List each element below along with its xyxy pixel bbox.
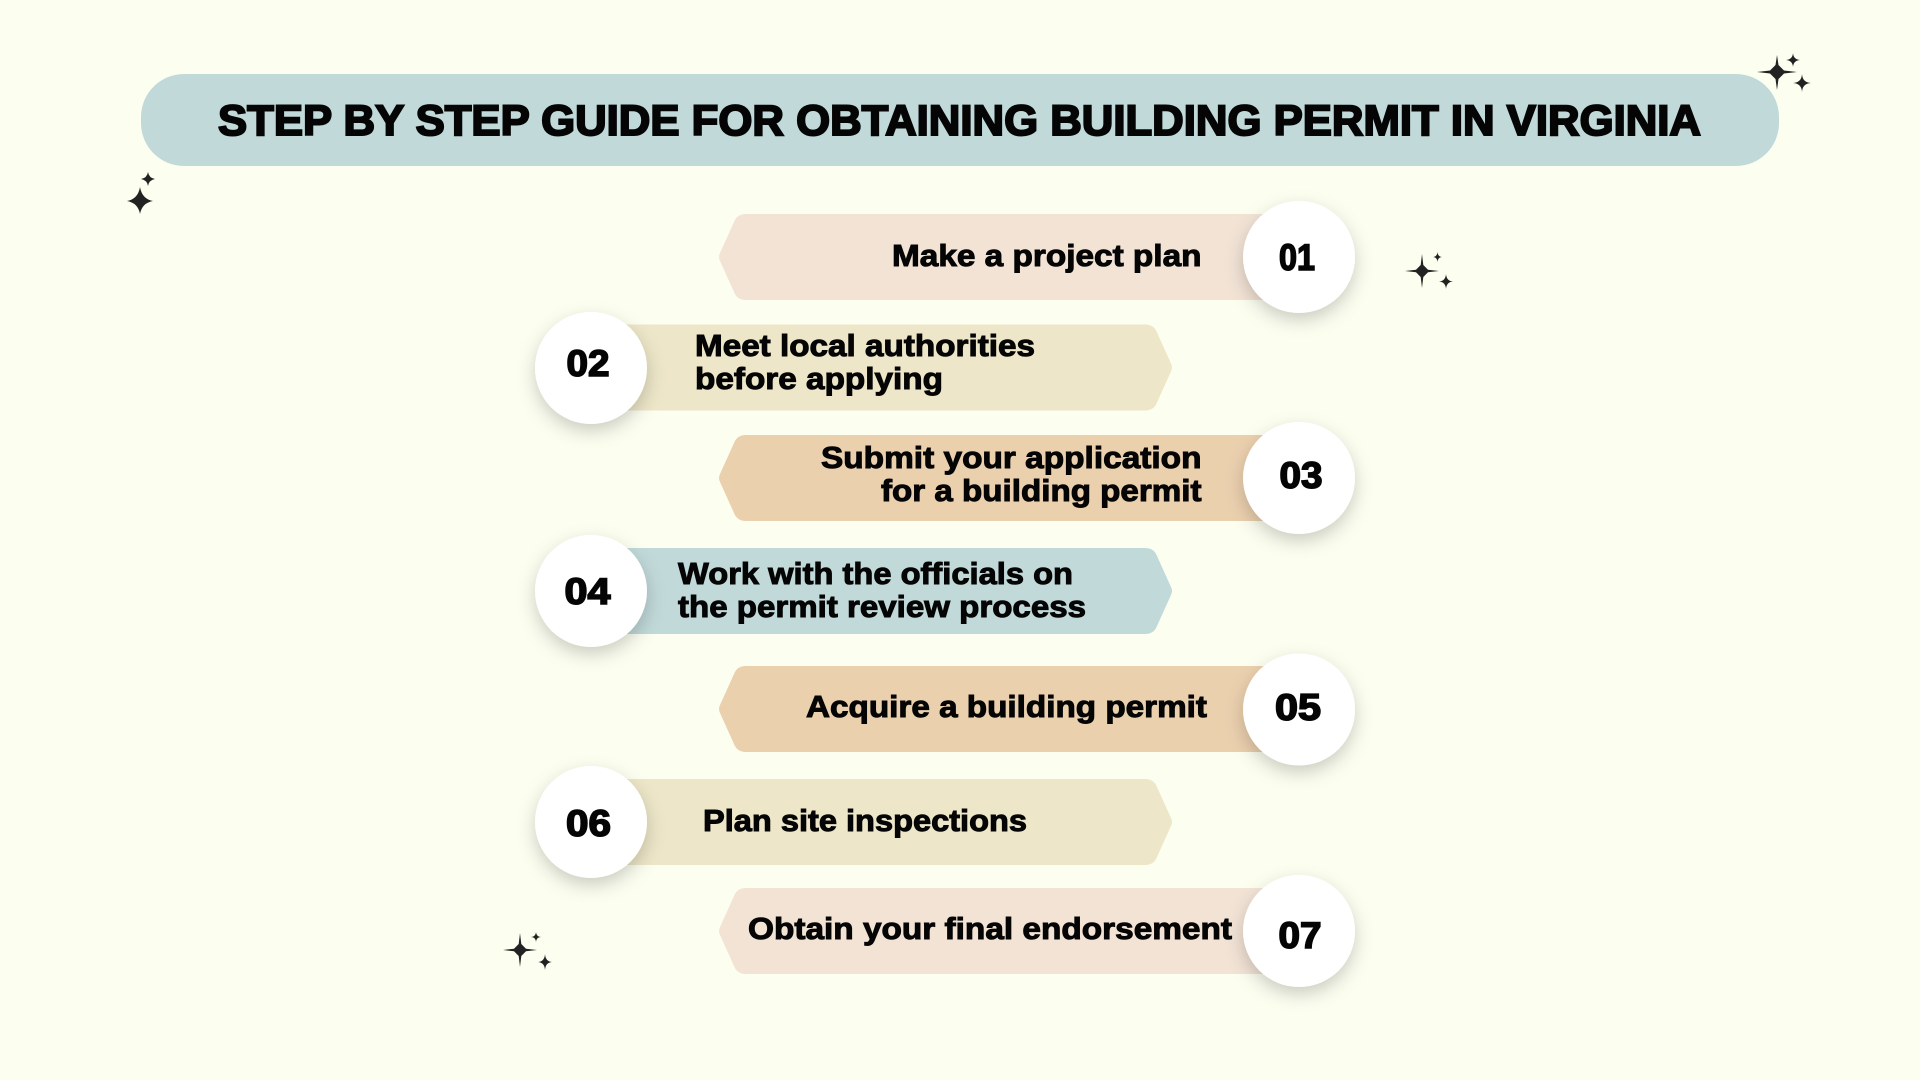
title: STEP BY STEP GUIDE FOR OBTAINING BUILDING PERMIT IN VIRGINIA: [218, 97, 1701, 145]
icon: sparkles top left: [127, 172, 155, 214]
number circle 07: 07: [1278, 915, 1322, 956]
ribbon 04: [591, 548, 1172, 634]
step 06: [535, 766, 1172, 878]
label 02: before applying: [695, 361, 943, 396]
icon: sparkles middle right: [1405, 252, 1453, 289]
step 03: [719, 422, 1355, 534]
label 06: Plan site inspections: [703, 803, 1027, 838]
step 07: [719, 875, 1355, 987]
label 05: Acquire a building permit: [806, 689, 1207, 724]
label 07: Obtain your final endorsement: [748, 911, 1232, 946]
ribbon 01: [719, 214, 1300, 300]
label 03: Submit your application: [821, 440, 1202, 475]
number circle 03: 03: [1280, 455, 1322, 496]
number circle 02: [535, 312, 647, 424]
step 02: [535, 312, 1172, 424]
label 04: Work with the officials on: [678, 556, 1073, 591]
number circle 01: 01: [1279, 237, 1315, 278]
label 01: Make a project plan: [892, 238, 1202, 273]
number circle 04: 04: [564, 571, 611, 612]
ribbon 07: [719, 888, 1300, 974]
number circle 03: [1243, 422, 1355, 534]
label 03: for a building permit: [881, 473, 1202, 508]
number circle 06: [535, 766, 647, 878]
ribbon 03: [719, 435, 1300, 521]
icon: sparkles bottom: [503, 932, 552, 970]
number circle 04: [535, 535, 647, 647]
label 04: the permit review process: [678, 589, 1086, 624]
title banner: [141, 74, 1779, 166]
icon: sparkles top right: [1757, 53, 1811, 92]
number circle 07: [1243, 875, 1355, 987]
label 02: Meet local authorities: [695, 328, 1035, 363]
ribbon 06: [591, 779, 1172, 865]
number circle 02: 02: [566, 343, 610, 384]
number circle 05: [1243, 654, 1355, 766]
step 01: [719, 201, 1355, 313]
number circle 06: 06: [566, 803, 611, 844]
number circle 05: 05: [1275, 687, 1321, 728]
ribbon 02: [591, 324, 1172, 410]
step 04: [535, 535, 1172, 647]
step 05: [719, 654, 1355, 766]
ribbon 05: [719, 666, 1300, 752]
number circle 01: [1243, 201, 1355, 313]
